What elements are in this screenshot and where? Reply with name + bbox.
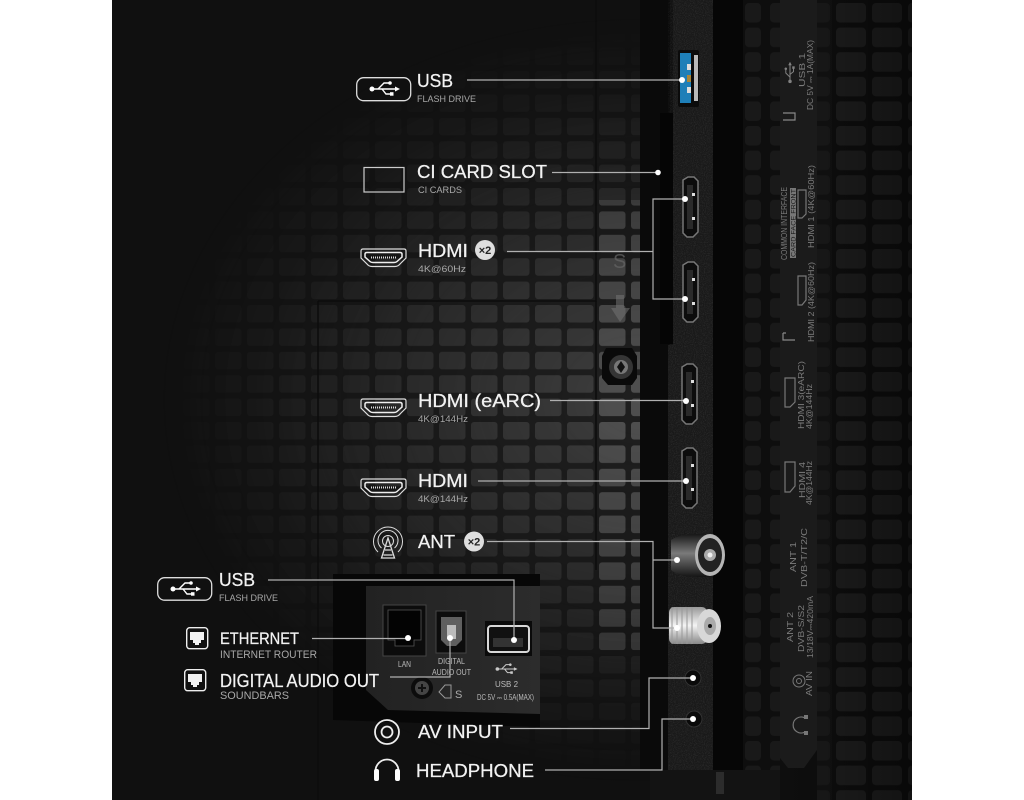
port: av jack [685, 670, 701, 686]
hdmi 3 label: 4K@144Hz [805, 384, 814, 429]
side connector plate [366, 586, 540, 714]
callout: usb flash drive top [357, 71, 685, 105]
hdmi 3 label: HDMI 3(eARC) [797, 361, 806, 429]
headphone label [793, 715, 808, 735]
callout: ci card slot: CI CARD SLOT [417, 162, 547, 182]
connector strip [640, 0, 724, 794]
ant 2 label: 13/18V⎓420mA [806, 595, 815, 658]
ant 1 label: DVB-T/T2/C [800, 528, 809, 587]
hdmi 4 label: HDMI 4 [798, 461, 807, 498]
port: antenna 2 satellite f-connector [669, 607, 721, 644]
plate screw [411, 677, 462, 701]
callout: ant x2 [374, 527, 680, 631]
ant 1 label: ANT 1 [789, 541, 798, 572]
callout: digital audio out: DIGITAL AUDIO OUT [220, 671, 379, 691]
back panel right of the connector strip [650, 0, 912, 800]
callout: hdmi: HDMI [418, 471, 468, 491]
usb 2 port [477, 621, 534, 702]
callout: ci card slot: CI CARDS [418, 185, 462, 196]
right silkscreen label strip [780, 0, 817, 768]
usb 1 label: USB 1 [798, 52, 807, 87]
callout: ci card slot [364, 162, 661, 196]
photo background [112, 0, 673, 800]
port: headphone jack [686, 711, 702, 727]
ant 2 label [786, 595, 815, 658]
usb 1 label: DC 5V ⎓ 1A(MAX) [806, 40, 815, 110]
callout: hdmi: 4K@144Hz [418, 494, 468, 505]
callout: headphone [374, 716, 696, 781]
port: hdmi 3 [682, 364, 697, 424]
port: hdmi 4 [682, 448, 697, 508]
usb 1 label [783, 40, 815, 120]
hdmi 2 label [783, 262, 816, 342]
ant 2 label: ANT 2 [786, 611, 795, 642]
callout: av input [375, 675, 696, 744]
usb 2 port: DC 5V ⎓ 0.5A(MAX) [477, 693, 534, 702]
callout: hdmi x2: ×2 [479, 245, 491, 257]
port: usb 3 blue [678, 50, 699, 107]
callout: usb flash drive top: FLASH DRIVE [417, 94, 476, 105]
callout: hdmi x2: HDMI [418, 241, 468, 261]
callout: ethernet: ETHERNET [220, 629, 299, 648]
callout: ethernet: INTERNET ROUTER [220, 649, 317, 661]
hdmi 4 label: 4K@144Hz [805, 461, 814, 505]
usb 2 port: USB 2 [495, 679, 518, 689]
ant 1 label [789, 528, 809, 587]
icon: antenna [374, 527, 402, 558]
callout: headphone: HEADPHONE [416, 761, 534, 781]
ant 2 label: DVB-S/S2 [797, 604, 806, 652]
hdmi 3 label [785, 361, 814, 429]
callout: hdmi earc [361, 391, 689, 425]
callout: digital audio out [185, 635, 453, 702]
callout: ant x2: ×2 [468, 536, 480, 548]
callout: usb flash drive side: FLASH DRIVE [219, 593, 278, 604]
callout: hdmi x2: 4K@60Hz [418, 264, 466, 275]
callout: ethernet [187, 628, 411, 661]
screw and engraved marks on back cover: S [613, 251, 626, 273]
callout: digital audio out: SOUNDBARS [220, 690, 289, 702]
callout: usb flash drive side [158, 570, 517, 643]
av in label [793, 671, 814, 696]
common interface and hdmi 1 label: CARD FACE FRONT [792, 189, 798, 257]
callout: hdmi [361, 471, 689, 505]
lan port: LAN [398, 660, 411, 669]
callout: usb flash drive top: USB [417, 71, 453, 91]
callout: usb flash drive side: USB [219, 570, 255, 590]
hdmi 2 label: HDMI 2 (4K@60Hz) [807, 262, 816, 342]
av in label: AV IN [805, 671, 814, 696]
digital audio out port: DIGITAL [438, 657, 465, 666]
callout: hdmi earc: 4K@144Hz [418, 414, 468, 425]
digital audio out port: AUDIO OUT [432, 668, 471, 677]
common interface and hdmi 1 label [780, 165, 816, 260]
lan port [383, 605, 426, 669]
callout: hdmi earc: HDMI (eARC) [418, 391, 541, 411]
callout: av input: AV INPUT [418, 722, 503, 742]
screw and engraved marks on back cover [602, 251, 637, 385]
digital audio out port [432, 611, 471, 677]
port: hdmi 1 [683, 177, 698, 237]
port: hdmi 2 [683, 262, 698, 322]
common interface and hdmi 1 label: COMMON INTERFACE [780, 187, 789, 260]
common interface and hdmi 1 label: HDMI 1 (4K@60Hz) [807, 165, 816, 248]
port: antenna 1 coax [671, 534, 725, 577]
plate screw: S [455, 689, 462, 701]
callout: ant x2: ANT [418, 532, 455, 552]
hdmi 4 label [785, 461, 814, 505]
callout: hdmi x2 [361, 196, 688, 302]
side connector recess [333, 574, 540, 727]
